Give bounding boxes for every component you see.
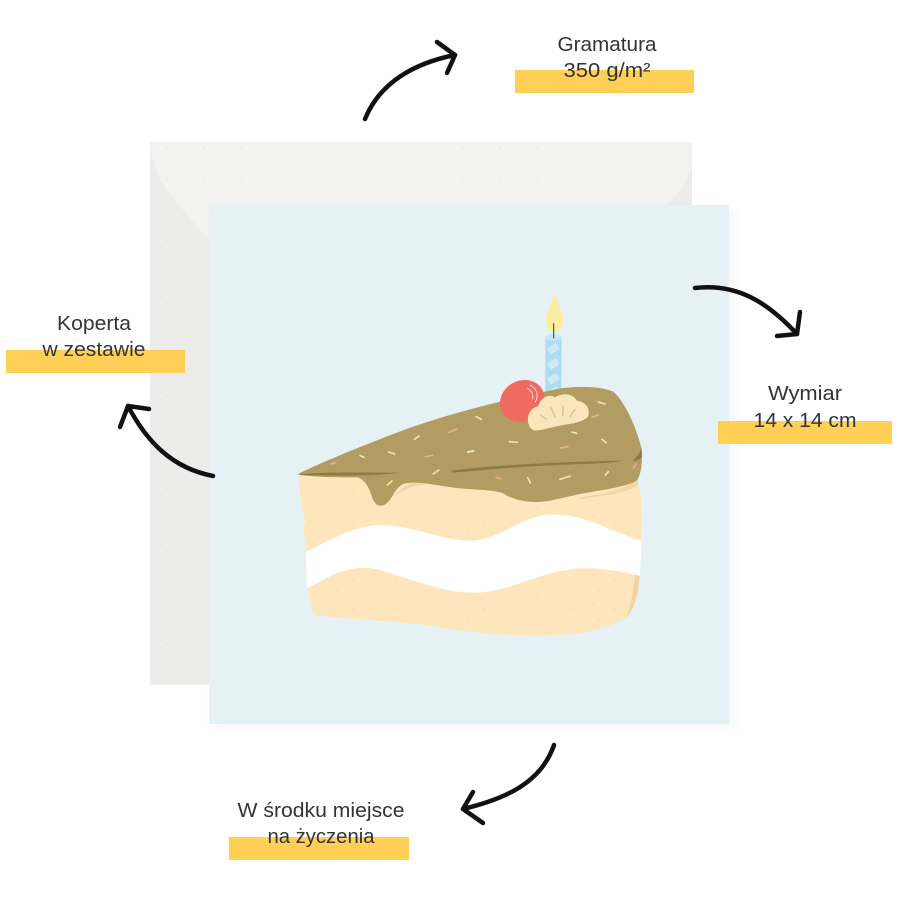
sponge side edge (627, 574, 639, 617)
label: size: 14 x 14 cm (754, 410, 856, 432)
highlight bar (6, 350, 185, 373)
label text: Gramatura (558, 34, 657, 56)
card shadow (213, 209, 735, 729)
highlight bar (229, 837, 409, 860)
label: size (718, 383, 892, 444)
envelope (150, 142, 692, 685)
label: grammage: 350 g/m² (564, 60, 651, 82)
label text: Wymiar (768, 383, 842, 405)
chocolate icing (297, 387, 642, 506)
cream layer (306, 514, 642, 593)
envelope flap (150, 142, 692, 240)
label: envelope: w zestawie (41, 339, 146, 361)
cherry (500, 380, 544, 422)
sprinkles (331, 402, 636, 485)
label: inside: na życzenia (268, 826, 375, 848)
sponge (298, 476, 642, 635)
envelope body (150, 142, 692, 685)
label: grammage (515, 34, 694, 93)
label: envelope (6, 313, 185, 373)
icing dark folds (300, 447, 642, 476)
arrow to grammage label (365, 42, 455, 119)
arrow to size label (695, 287, 800, 336)
cake illustration (297, 293, 642, 635)
label text: W środku miejsce (238, 800, 404, 822)
arrow to envelope label (120, 406, 213, 476)
arrow to inside label (463, 745, 554, 823)
highlight bar (515, 70, 694, 93)
label: inside (229, 800, 409, 860)
icing shadow (395, 477, 638, 499)
highlight bar (718, 421, 892, 444)
label text: Koperta (57, 313, 132, 335)
candle (545, 293, 563, 398)
whipped cream (528, 394, 589, 431)
greeting card (209, 205, 729, 724)
